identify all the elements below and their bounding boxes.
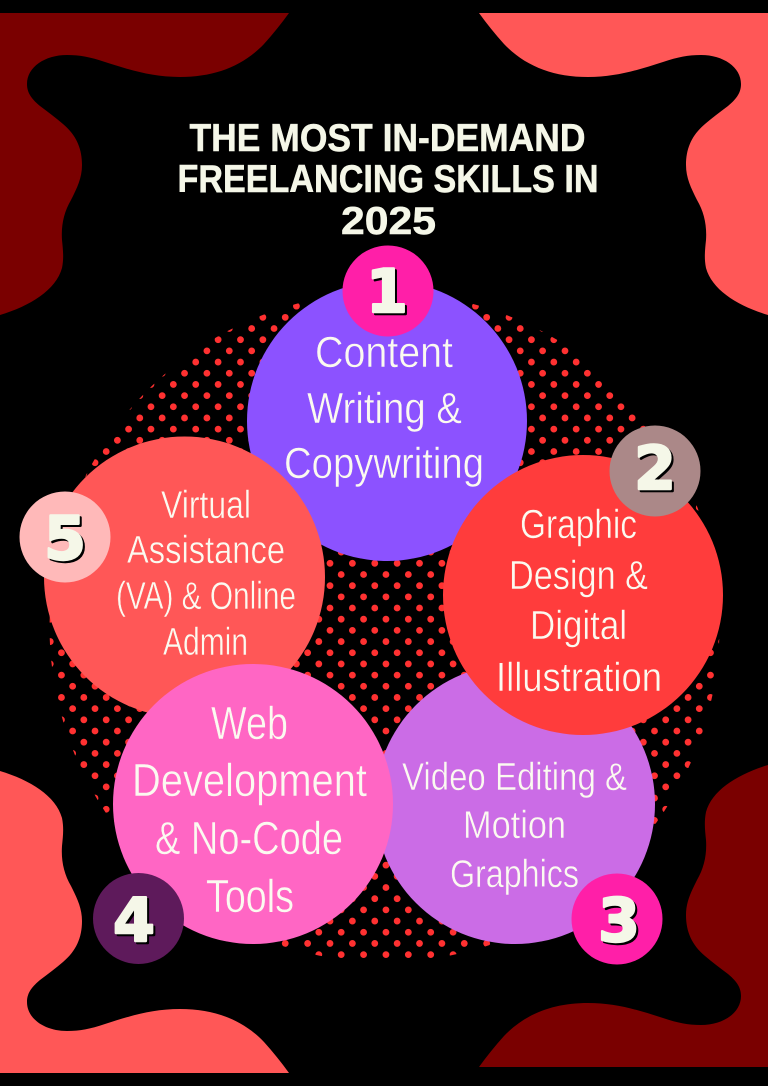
skill 2: graphic design [443, 455, 723, 735]
blob: top left corner [0, 13, 289, 315]
skill 4: web development: Development [132, 754, 367, 806]
skill 2: graphic design: Illustration [496, 654, 662, 700]
skill 2: graphic design: Design & [509, 552, 648, 598]
badge 2 [610, 426, 700, 516]
skill 1: content writing: Writing & [307, 385, 462, 433]
skill 3: video editing: Video Editing & [402, 756, 627, 799]
blob: bottom right corner [479, 765, 768, 1067]
badge 1 [342, 246, 434, 336]
title: 2025 [341, 200, 436, 243]
skill 1: content writing [247, 281, 527, 561]
badge 4 [93, 873, 184, 964]
skill 3: video editing [375, 664, 655, 944]
skill 5: virtual assistance: Assistance [127, 529, 285, 572]
skill 2: graphic design: Digital [530, 602, 627, 648]
badge 5 [20, 492, 110, 582]
badge 3 [572, 874, 662, 964]
blob: top right corner [479, 13, 768, 315]
skill 5: virtual assistance: (VA) & Online [116, 575, 296, 618]
skill 4: web development: Web [211, 697, 288, 749]
badge 3: 3 [598, 886, 640, 956]
badge 2: 2 [634, 434, 676, 504]
badge 5: 5 [44, 504, 86, 574]
title: THE MOST IN-DEMAND [190, 117, 586, 160]
skill 5: virtual assistance: Admin [163, 621, 248, 664]
skill 2: graphic design: Graphic [520, 501, 637, 547]
skill 5: virtual assistance: Virtual [161, 484, 251, 527]
skill 1: content writing: Copywriting [284, 440, 484, 488]
skill 4: web development [113, 664, 393, 944]
skill 3: video editing: Graphics [450, 853, 579, 896]
dotted circle backdrop [50, 303, 720, 958]
title [178, 117, 598, 243]
badge 1: 1 [366, 257, 408, 327]
skill 4: web development: & No-Code [155, 812, 343, 864]
skill 4: web development: Tools [206, 870, 294, 922]
skill 5: virtual assistance [44, 436, 325, 718]
blob: bottom left corner [0, 771, 289, 1073]
badge 4: 4 [113, 886, 155, 956]
skill 1: content writing: Content [315, 329, 453, 377]
title: FREELANCING SKILLS IN [178, 158, 598, 201]
skill 3: video editing: Motion [463, 804, 566, 847]
